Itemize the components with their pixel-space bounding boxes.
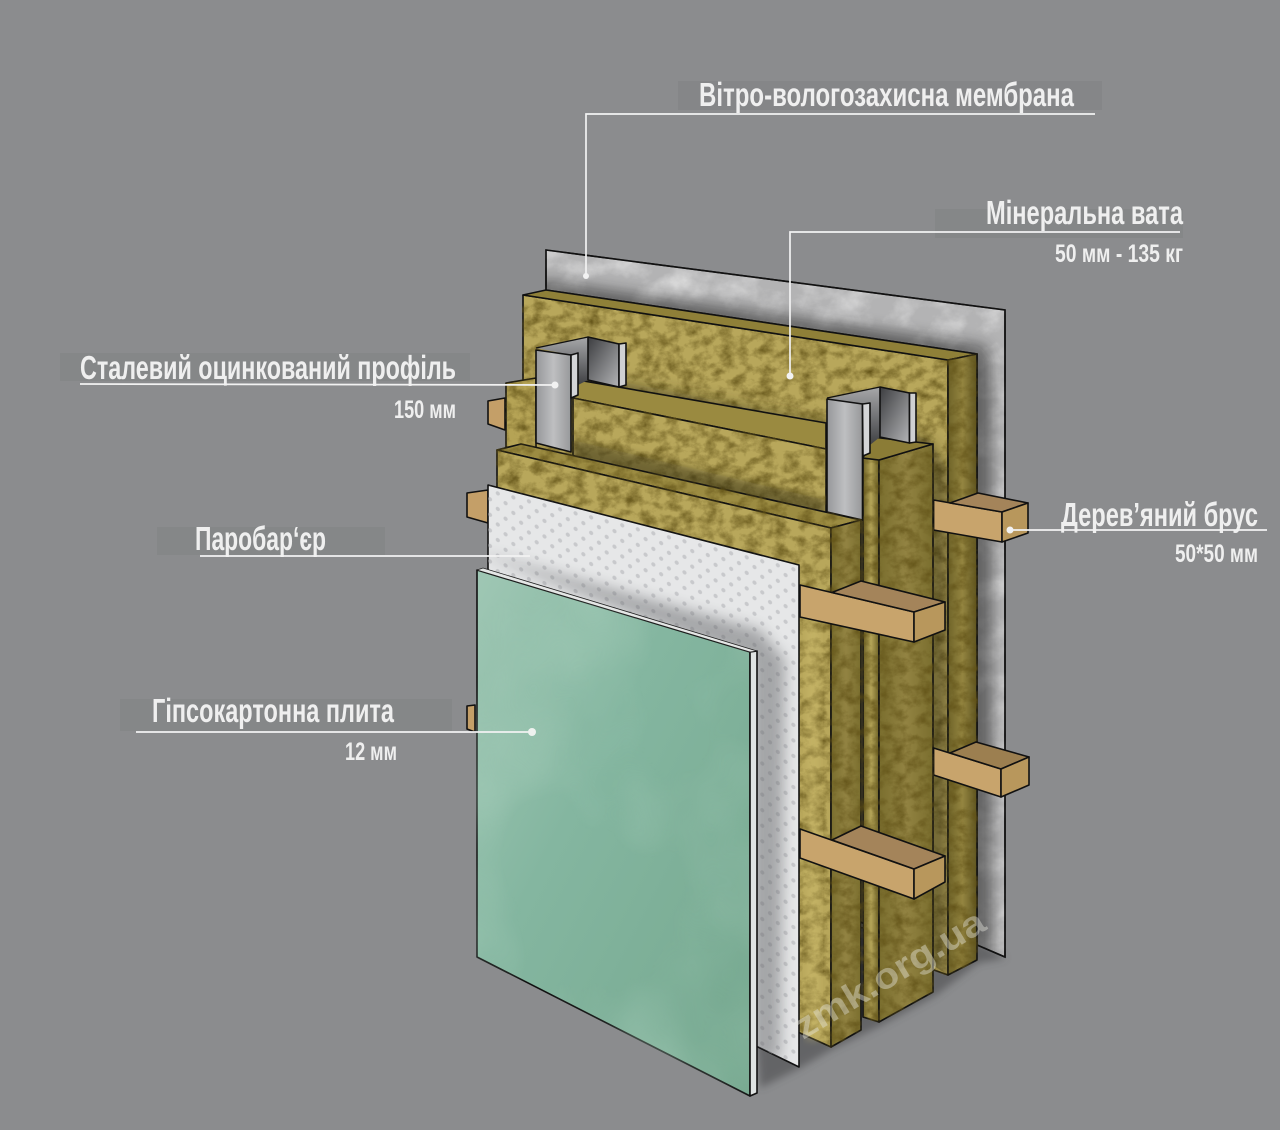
label: wind and moisture membrane: Вітро-вологозахисна мембрана (699, 76, 1074, 113)
label: gypsum board: Гіпсокартонна плита (152, 692, 394, 729)
steel profile left (536, 337, 626, 452)
layer: wind and moisture membrane (520, 250, 1005, 980)
label: vapor barrier: Паробар‘єр (195, 520, 326, 557)
layer: gypsum board (477, 568, 757, 1096)
label: vapor barrier (157, 520, 530, 557)
steel profile right (827, 387, 916, 520)
label: wooden beam (1006, 496, 1267, 568)
ground shadow (757, 940, 1006, 1088)
layer: front mineral wool board (497, 444, 861, 1047)
left beam stubs (467, 398, 505, 732)
label: gypsum board (120, 692, 536, 766)
layer: vapor barrier (470, 485, 799, 1067)
back right wooden beams (934, 493, 1029, 797)
label: mineral wool: Мінеральна вата (986, 194, 1183, 231)
front wooden beams (800, 581, 945, 899)
label: mineral wool (786, 194, 1183, 380)
label: steel profile: Сталевий оцинкований профіль (80, 349, 456, 386)
watermark: zmk.org.ua (786, 900, 993, 1047)
layer: back mineral wool board (523, 290, 977, 975)
label: wind and moisture membrane (583, 76, 1102, 279)
layer: middle mineral wool (506, 378, 933, 1022)
label: steel profile (60, 349, 558, 424)
label: steel profile: 150 мм (394, 396, 456, 424)
label: mineral wool: 50 мм - 135 кг (1055, 240, 1183, 268)
label: gypsum board: 12 мм (345, 738, 397, 766)
